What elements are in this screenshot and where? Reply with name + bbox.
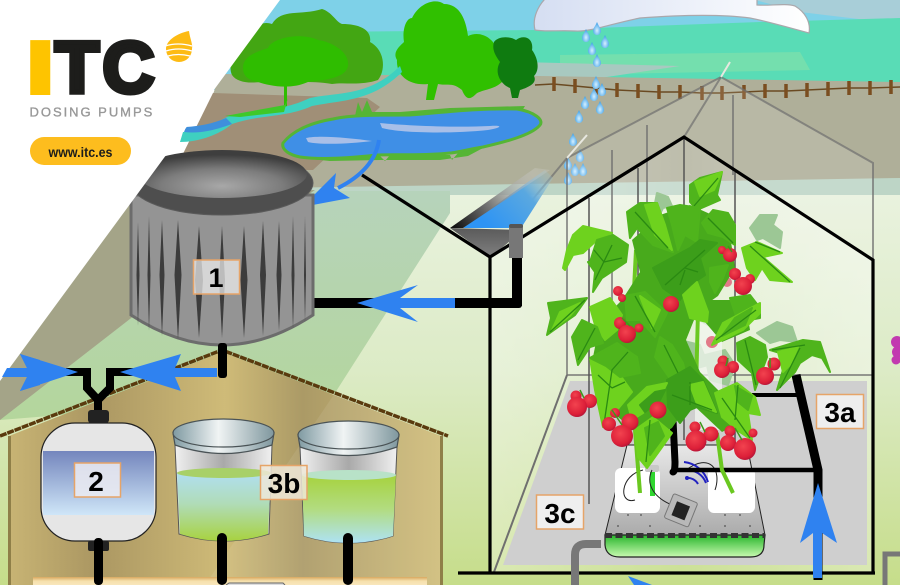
logo wordmark — [27, 27, 154, 108]
dark spiky leaf — [572, 320, 603, 365]
logo drop icon — [165, 31, 192, 62]
website pill: www.itc.es — [48, 144, 113, 160]
label 1: 1 — [208, 263, 224, 293]
tomato calyxes — [580, 246, 770, 440]
white logo panel — [0, 0, 280, 381]
label 3c — [536, 495, 584, 529]
trees — [231, 1, 538, 107]
tomato plant — [547, 172, 830, 493]
sensor device — [664, 493, 698, 527]
upper right dark leaf — [702, 210, 735, 245]
pale background leaves and centre — [655, 193, 797, 430]
logo wordmark: I — [27, 27, 53, 108]
dark lower right leaf — [737, 337, 767, 390]
grey drain pipe — [575, 544, 601, 585]
lower right top leaves — [683, 282, 760, 322]
pale tomatoes — [596, 277, 732, 388]
logo wordmark: T — [55, 28, 99, 108]
large bright leaf — [627, 203, 673, 252]
bucket right — [298, 421, 399, 585]
blue arrow right — [120, 354, 217, 391]
blue up arrow — [800, 483, 837, 578]
bright lower leaf — [715, 383, 760, 440]
stems — [632, 230, 733, 493]
greenhouse floor — [503, 381, 867, 565]
right fan leaf — [770, 340, 830, 390]
greenhouse back frame — [494, 77, 873, 572]
tank 1 — [131, 150, 313, 345]
pond grass — [355, 100, 525, 120]
website pill — [30, 137, 131, 165]
thin support strings — [589, 137, 735, 504]
logo wordmark: C — [102, 28, 154, 108]
label 1 — [194, 260, 240, 294]
right bright leaf — [742, 242, 792, 282]
cloud — [534, 0, 809, 33]
upper centre leaves — [653, 205, 717, 300]
upper left dark leaf — [588, 235, 628, 292]
blue curved arrow from pond — [302, 140, 379, 207]
bright centre left leaf — [590, 298, 622, 340]
grey frame at bottom right — [885, 554, 900, 585]
green dripper — [645, 465, 659, 496]
hanging centre top leaf — [625, 292, 667, 337]
black inlet pipe and arrow to tank — [305, 224, 523, 322]
lower blue arrow — [628, 576, 652, 585]
raindrops — [564, 22, 609, 185]
gutter funnel — [450, 168, 553, 257]
blue arrow left — [0, 354, 78, 391]
tomatoes — [567, 246, 780, 460]
lower hanging leaf — [635, 417, 672, 468]
pink flowers at right edge — [891, 336, 900, 364]
leaf with fruit — [710, 265, 728, 293]
label 2 — [74, 463, 120, 497]
bucket left — [173, 419, 274, 585]
pressure vessel 2 — [41, 410, 156, 585]
tagline: DOSING PUMPS — [30, 104, 154, 120]
tank ribs — [136, 216, 306, 340]
black supply pipes — [672, 375, 818, 580]
pond — [283, 100, 541, 161]
top leaf — [690, 172, 722, 210]
foliage backing mass — [592, 205, 750, 442]
label 3a: 3a — [824, 397, 856, 428]
grow tray — [605, 445, 765, 557]
label 3b — [260, 466, 307, 500]
label 3b: 3b — [268, 468, 300, 499]
label 3c: 3c — [544, 498, 576, 529]
distribution pipes — [0, 343, 227, 412]
centre right leaves — [655, 337, 690, 393]
tomato foliage — [547, 172, 830, 468]
large hanging centre leaf — [590, 343, 640, 427]
wireless signal arcs — [684, 462, 708, 484]
wires — [624, 463, 717, 505]
ITC logo — [27, 27, 192, 165]
label 3a — [816, 394, 864, 428]
lower left hand leaf — [547, 298, 587, 335]
house — [0, 350, 448, 585]
stream — [180, 66, 402, 142]
arched centre leaf — [628, 383, 667, 420]
greenhouse front frame — [362, 137, 875, 573]
label 2: 2 — [88, 466, 104, 497]
fence — [535, 77, 900, 100]
upper left arched leaf — [563, 226, 612, 270]
arrow tail over panel — [2, 354, 40, 391]
greenhouse — [362, 62, 875, 573]
